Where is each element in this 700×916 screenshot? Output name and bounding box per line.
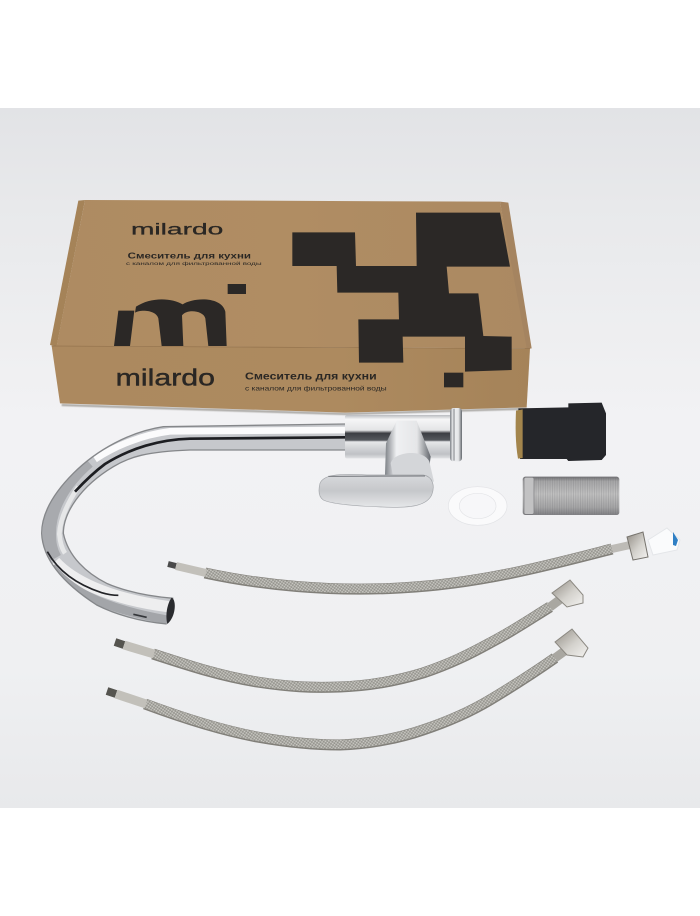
tube threads	[535, 478, 618, 514]
logo dot	[228, 284, 246, 294]
box shadow	[62, 405, 527, 414]
hose 2 tip	[115, 642, 124, 645]
hose 2 braid	[153, 606, 550, 687]
hose 2 hex nut	[552, 580, 583, 607]
spout dark reflection	[75, 437, 345, 492]
curved chrome spout	[30, 420, 347, 633]
front product title: Смеситель для кухни	[245, 371, 377, 382]
braided hose 2	[115, 580, 583, 687]
braided hose 3	[107, 629, 588, 745]
hose 3 collar	[555, 650, 566, 658]
hose 1 hex nut	[627, 532, 648, 560]
black adapter	[518, 403, 606, 461]
hose 3 hex nut	[555, 629, 588, 657]
spout lower shade	[52, 567, 168, 620]
spout tip end cap	[166, 598, 175, 624]
neck collar	[391, 453, 434, 482]
braided hose 1	[168, 528, 680, 589]
product photo scene	[0, 108, 700, 808]
box right flap	[500, 202, 532, 349]
top product title: Смеситель для кухни	[128, 251, 251, 260]
hose 2 collar	[550, 598, 562, 607]
top brand name: milardo	[131, 222, 223, 239]
hose 1 braid	[205, 548, 612, 589]
spout inner highlight	[59, 487, 78, 553]
handle top edge	[328, 474, 425, 478]
hose 3 braid	[145, 658, 555, 744]
mounting flange	[450, 408, 462, 461]
tube inner rim	[524, 477, 534, 514]
hose 1 fitting	[176, 566, 206, 573]
spout top highlight	[95, 430, 345, 459]
spout outer shading	[49, 462, 88, 558]
front edge line	[52, 346, 530, 349]
cardboard box	[50, 200, 532, 414]
threaded steel tube	[523, 477, 619, 515]
horizontal body	[345, 415, 453, 458]
adapter brass insert	[516, 409, 523, 459]
pixel pattern graphic	[292, 213, 512, 372]
hose 2 outer	[153, 607, 550, 687]
lever handle	[319, 474, 433, 507]
pixel square on front	[444, 373, 463, 387]
hose 3 tip	[107, 691, 116, 694]
front product subtitle: с каналом для фильтрованной воды	[245, 384, 387, 392]
photo backdrop	[0, 108, 700, 808]
flange ring line	[452, 409, 455, 461]
spout lower dark line	[47, 552, 118, 595]
hose 1 outer	[205, 549, 612, 589]
large m logo	[114, 299, 227, 346]
hose 1 tip	[168, 564, 176, 566]
hose 3 outer	[145, 658, 555, 745]
spout outline	[42, 424, 345, 624]
top product subtitle: с каналом для фильтрованной воды	[126, 260, 263, 266]
installation parts	[448, 403, 619, 525]
vertical neck	[385, 421, 431, 475]
spout lower highlight	[55, 562, 168, 607]
spout reflection mark	[133, 614, 147, 617]
box top panel	[57, 200, 527, 348]
box front panel	[52, 346, 530, 413]
hose 3 fitting	[116, 694, 146, 704]
hose 1 blue clip	[673, 532, 678, 546]
faucet body and handle	[319, 408, 462, 507]
box left flap	[50, 200, 85, 347]
hose 2 fitting	[124, 645, 154, 654]
spout clipped reflections	[42, 424, 345, 624]
spout tube body	[42, 424, 345, 622]
washer centre	[460, 494, 496, 518]
white washer	[448, 487, 507, 525]
hose 1 white connector	[648, 528, 680, 555]
front brand name: milardo	[116, 365, 215, 391]
hose 1 collar	[612, 545, 630, 549]
